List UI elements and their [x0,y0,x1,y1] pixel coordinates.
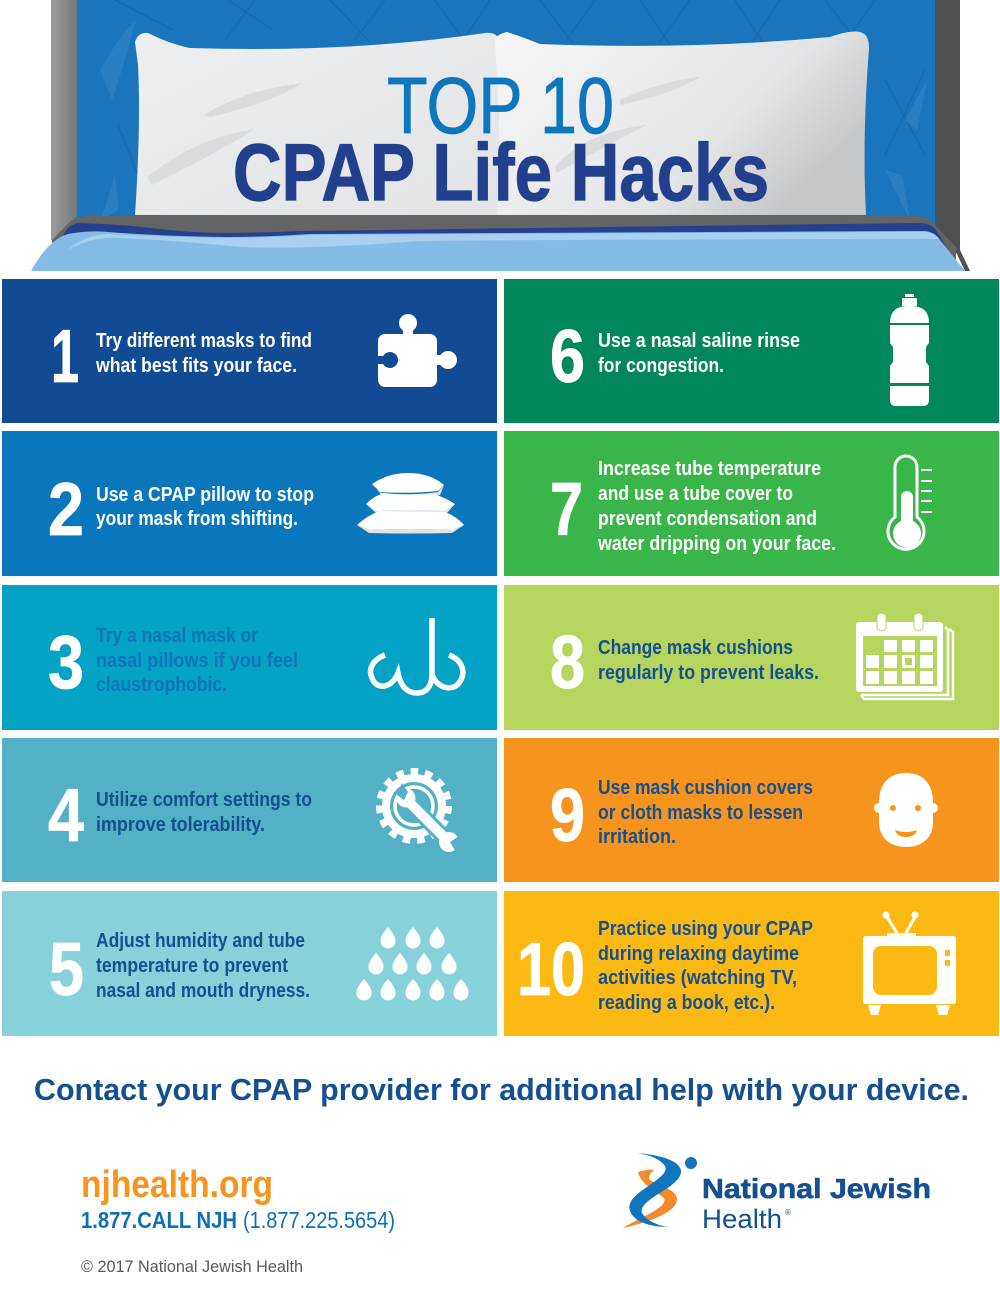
text: hack 6 [598,330,800,377]
text: hack 3 [96,625,298,696]
left pillow [135,33,500,215]
phone bold: 1.877.CALL NJH [81,1207,237,1233]
text: hack 10: reading a book, etc.). [598,992,775,1014]
text: hack 6: for congestion. [598,355,724,377]
number 5: 5 [49,927,84,1011]
icon: gear and wrench [380,772,463,852]
text: hack 5: Adjust humidity and tube [96,930,305,952]
phone digits: (1.877.225.5654) [243,1207,395,1233]
text: hack 3: Try a nasal mask or [96,625,258,647]
number 1: 1 [51,314,79,398]
headboard frame [51,0,970,271]
icon: water drops [356,927,469,1001]
text: hack 10: Practice using your CPAP [598,918,813,940]
blanket [31,231,965,271]
text: hack 7: prevent condensation and [598,508,817,530]
text: hack 4 [96,789,312,836]
title [233,61,769,218]
text: hack 3: nasal pillows if you feel [96,650,298,672]
right pillow [495,32,869,215]
blanket highlight [68,232,939,250]
website: njhealth.org [81,1164,273,1206]
panel: hack 8 mask cushions [504,585,999,730]
number 2: 2 [48,467,84,551]
text: hack 10 [598,918,813,1014]
icon: face [874,773,938,847]
text: hack 3: claustrophobic. [96,674,227,696]
text: hack 10: activities (watching TV, [598,967,797,989]
panel: hack 6 saline rinse [504,279,999,423]
text: hack 1 [95,330,312,377]
text: hack 2: Use a CPAP pillow to stop [96,484,314,506]
text: hack 9 [598,777,813,848]
text: hack 1: Try different masks to find [96,330,312,352]
bed sheet edge [62,223,948,250]
panel: hack 1 masks [2,279,497,423]
text: hack 4: Utilize comfort settings to [96,789,312,811]
text: hack 7: and use a tube cover to [598,483,793,505]
text: hack 8 [598,637,819,684]
title line: CPAP Life Hacks: CPAP Life Hacks [233,128,769,218]
text: hack 9: irritation. [598,826,676,848]
number 10: 10 [517,927,585,1011]
text: hack 7: water dripping on your face. [597,533,836,555]
panel: hack 5 humidity [2,891,497,1036]
number 6: 6 [550,314,585,398]
logo: National Jewish Health: Health [702,1204,782,1234]
text: hack 9: Use mask cushion covers [598,777,813,799]
logo: National Jewish Health: ® [785,1208,791,1217]
icon: calendar [856,613,953,699]
panel: hack 4 settings [2,738,497,882]
copyright: © 2017 National Jewish Health [81,1257,303,1276]
panel: hack 2 pillow [2,431,497,576]
bed frame [52,216,956,271]
text: hack 2 [96,484,314,530]
number 3: 3 [48,620,84,704]
website and phone contact [81,1164,395,1233]
number 9: 9 [550,773,585,857]
text: hack 2: your mask from shifting. [96,508,298,530]
header: bed illustration [31,0,970,271]
callout: contact provider: Contact your CPAP provider for additional help with your device. [34,1072,969,1107]
icon: nose [371,618,463,693]
text: hack 5 [96,930,310,1002]
icon: bottle [890,294,929,406]
number 7: 7 [550,467,583,551]
number 8: 8 [550,620,585,704]
text: hack 7 [597,458,836,555]
panel: hack 3 nasal mask [2,585,497,730]
text: hack 8: regularly to prevent leaks. [598,662,819,684]
icon: television [863,912,956,1015]
text: hack 8: Change mask cushions [598,637,793,659]
text: hack 6: Use a nasal saline rinse [598,330,800,352]
text: hack 5: nasal and mouth dryness. [96,980,310,1002]
panel: hack 10 daytime practice [504,891,999,1036]
icon: puzzle piece [376,314,457,387]
text: hack 5: temperature to prevent [96,955,288,977]
logo: National Jewish Health [623,1153,931,1234]
panel: hack 7 tube temperature [504,431,999,576]
text: hack 9: or cloth masks to lessen [598,802,803,824]
number 4: 4 [48,773,84,857]
text: hack 4: improve tolerability. [96,814,265,836]
text: hack 10: during relaxing daytime [598,943,799,965]
icon: stack of pillows [357,473,464,534]
text: hack 7: Increase tube temperature [598,458,821,480]
logo wordmark: National Jewish [702,1173,931,1204]
logo mark [623,1153,697,1228]
icon: thermometer [888,456,932,549]
panel: hack 9 cushion covers [504,738,999,882]
text: hack 1: what best fits your face. [95,355,297,377]
title line: TOP 10: TOP 10 [387,61,614,150]
